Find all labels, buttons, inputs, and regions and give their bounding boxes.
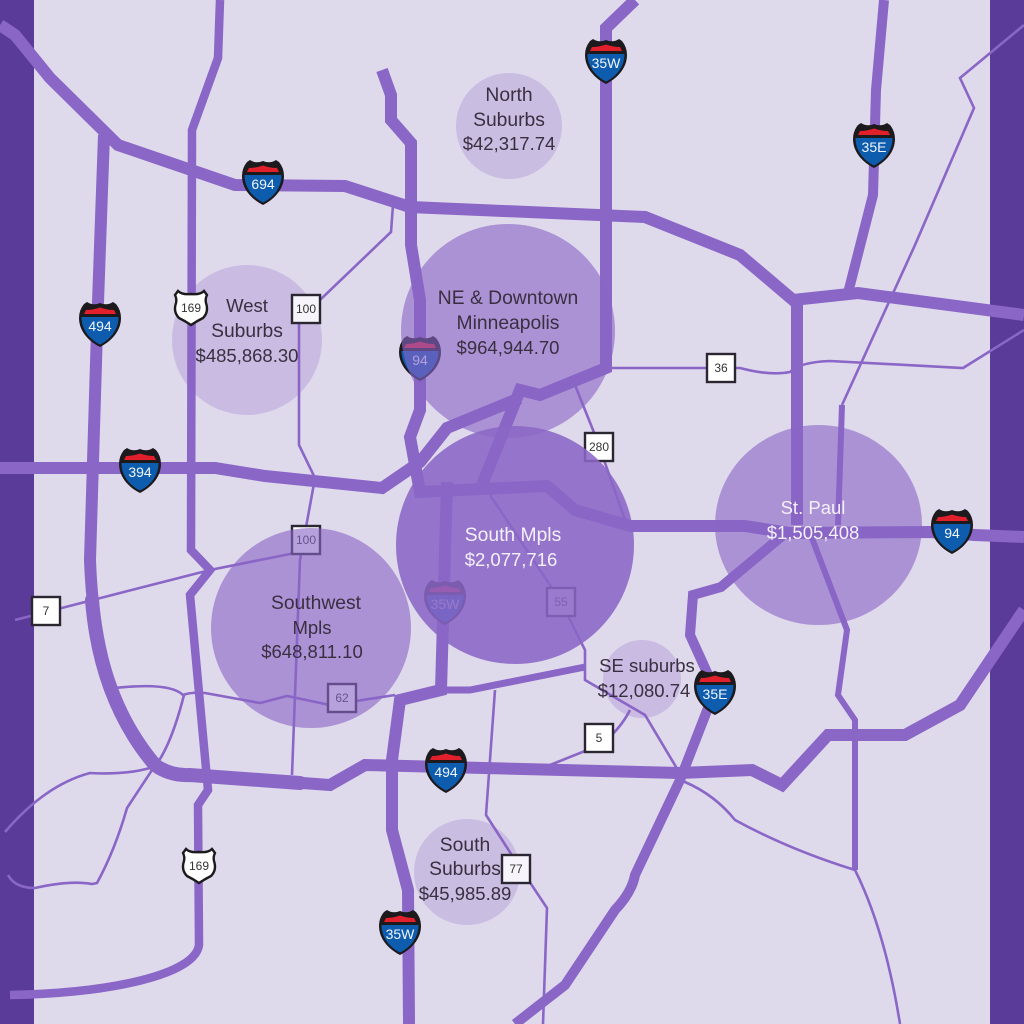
shield: US 169 north [175,291,207,325]
road: highway 61 [838,405,842,525]
marker: 100 south [292,526,320,554]
bubble: St. Paul [715,425,922,625]
shield: 94 east: 94 [944,525,960,541]
bubble: Southwest Mpls [211,528,411,728]
marker: 100 north: 100 [296,302,316,316]
road: I-394 [0,398,520,488]
marker: 36: 36 [714,361,728,375]
marker: 7 [32,597,60,625]
label: North Suburbs: $42,317.74 [463,133,555,154]
left side band [0,0,34,1024]
label: South Suburbs: Suburbs [429,859,501,880]
road: US 169 [10,0,220,995]
shield: 35W south [379,910,421,955]
road: I-494 south curve thickening [92,600,300,783]
shield: US 169 south: 169 [189,859,209,873]
label: West Suburbs: West [226,295,268,316]
shield: 494 south: 494 [434,764,458,780]
shield: 35E north: 35E [862,139,886,155]
shield: 35W north [585,39,627,84]
label: SE suburbs: $12,080.74 [598,680,690,701]
marker: 77: 77 [509,862,523,876]
label: Southwest Mpls: $648,811.10 [261,641,363,662]
marker: 280 [585,433,613,461]
label: West Suburbs: $485,868.30 [196,345,298,366]
bubble: North Suburbs [456,73,562,179]
label: NE and Downtown Minneapolis: Minneapolis [457,313,559,334]
shield: 394 [119,448,161,493]
marker: 36 [707,354,735,382]
label: Southwest Mpls: Mpls [292,617,332,638]
shield: US 169 south [183,849,215,883]
road: I-694 [0,25,1024,315]
shield: 494 south [425,748,467,793]
label: North Suburbs: Suburbs [473,110,545,131]
label: West Suburbs: Suburbs [211,321,283,342]
marker: 100 north [292,295,320,323]
bubble: West Suburbs [172,265,322,415]
shield: 35E south [694,670,736,715]
shield: 35E north [853,123,895,168]
shield: US 169 north: 169 [181,301,201,315]
marker: 5: 5 [596,731,603,745]
label: Southwest Mpls: Southwest [271,593,362,614]
shield: 35W south Minneapolis [424,580,466,625]
shield: 694: 694 [251,176,275,192]
road: highway 62 east [441,667,585,690]
bubble: South Suburbs [414,819,520,925]
label: NE and Downtown Minneapolis: $964,944.70 [457,337,559,358]
road: I-35W north [480,0,635,490]
label: South Mpls: South Mpls [465,525,561,546]
road: I-35E south [515,536,782,1024]
marker: 77 [502,855,530,883]
shield: 94 east [931,509,973,554]
road: St. Paul south [810,533,855,870]
shield: 494 west [79,302,121,347]
shield: 494 west: 494 [88,318,112,334]
shield: 694 [242,160,284,205]
label: South Mpls: $2,077,716 [465,549,557,570]
shield: 35E south: 35E [703,686,727,702]
shield: 35W north: 35W [592,55,621,71]
marker: 55: 55 [554,595,568,609]
label: NE and Downtown Minneapolis: NE & Downtown [438,288,578,309]
road: I-94 [382,70,1024,537]
shield: 394: 394 [128,464,152,480]
road: I-494 [90,135,1024,785]
shield: 94 downtown: 94 [412,352,428,368]
road: connector to St. Paul [791,300,803,525]
label: South Suburbs: $45,985.89 [419,883,511,904]
label: St. Paul: St. Paul [781,497,845,518]
marker: 62 [328,684,356,712]
label: SE suburbs: SE suburbs [599,655,695,676]
marker: 100 south: 100 [296,533,316,547]
shield: 35W south: 35W [386,926,415,942]
road: I-35E north [848,0,884,293]
marker: 280: 280 [589,440,609,454]
marker: 5 [585,724,613,752]
right side band [990,0,1024,1024]
marker: 55 [547,588,575,616]
shield: 35W south Minneapolis: 35W [431,596,460,612]
label: St. Paul: $1,505,408 [767,522,859,543]
bubble: SE suburbs [603,640,681,718]
marker: 7: 7 [43,604,50,618]
shield: 94 downtown [399,336,441,381]
bubble: NE and Downtown Minneapolis [401,224,615,438]
bubble: South Mpls [396,426,634,664]
road: I-35W south [392,482,447,1024]
marker: 62: 62 [335,691,349,705]
label: North Suburbs: North [485,85,533,106]
label: South Suburbs: South [440,835,490,856]
